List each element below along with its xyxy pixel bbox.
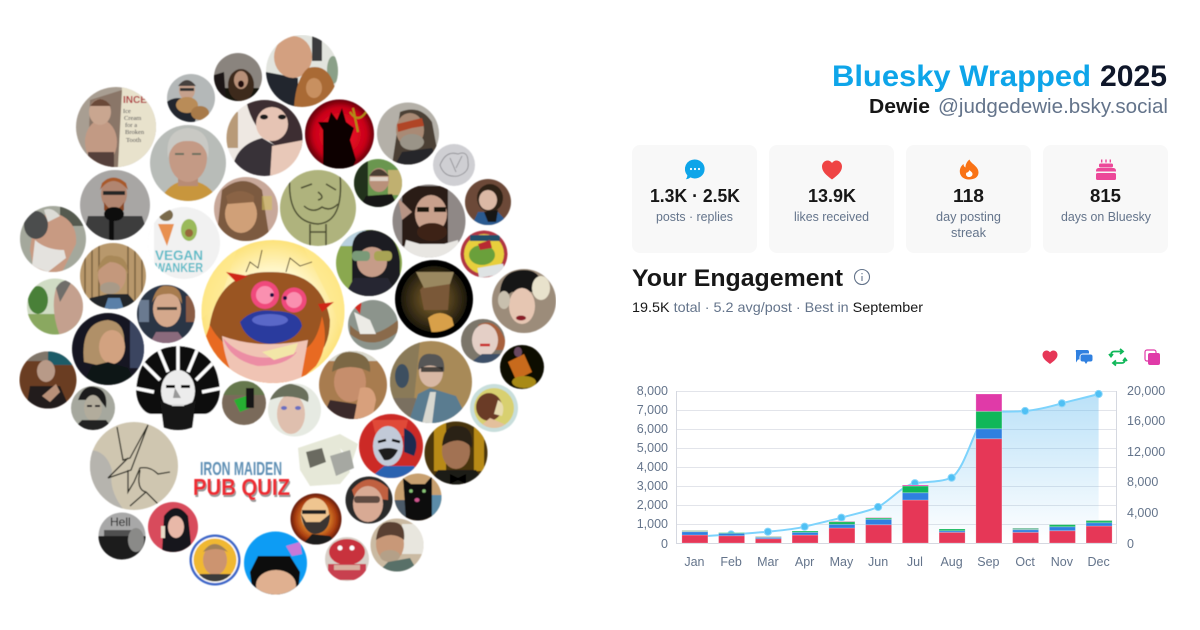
line points bbox=[728, 390, 1102, 538]
cumulative line bbox=[694, 394, 1099, 537]
chart legend icons bbox=[1042, 349, 1160, 366]
avatar cluster bbox=[19, 35, 556, 600]
icon: flame bbox=[960, 160, 978, 180]
avatar: bald man with spaniel bbox=[266, 35, 339, 107]
avatar: black and white portrait bbox=[71, 386, 115, 430]
avatar: man with blue ring bbox=[190, 534, 240, 586]
avatar: octopus poster bbox=[325, 537, 369, 581]
y axis right: 20,000 bbox=[1127, 384, 1165, 398]
avatar: man in cap with hand on cheek bbox=[319, 351, 387, 419]
avatar: pencil sketch bbox=[433, 144, 475, 186]
icon: info bbox=[854, 270, 870, 284]
bar: December bbox=[1086, 520, 1112, 543]
avatar: vegan mug: WANKER bbox=[155, 260, 204, 275]
icon: likes bbox=[1042, 350, 1058, 364]
avatar: woman with flower in hair bbox=[492, 269, 556, 333]
y axis right: 16,000 bbox=[1127, 414, 1165, 428]
avatar: ice cream book: INCE bbox=[123, 95, 147, 106]
x axis months: Apr bbox=[795, 555, 814, 569]
bar: September bbox=[976, 394, 1002, 543]
avatar: black cat bbox=[394, 473, 442, 522]
avatar: ice cream book bbox=[76, 87, 157, 168]
avatar: red clown painting bbox=[359, 414, 423, 478]
avatar: cleric in blue jacket bbox=[390, 341, 472, 424]
avatar: woman with glasses on head bbox=[214, 177, 278, 241]
avatar: Hell sign monochrome bbox=[98, 512, 146, 560]
y axis left bbox=[637, 384, 668, 551]
panel: day posting streak bbox=[906, 145, 1031, 253]
y axis left: 7,000 bbox=[637, 403, 668, 417]
x axis months: Dec bbox=[1087, 555, 1110, 569]
avatar: goblin graffiti bbox=[89, 421, 179, 511]
x axis months bbox=[684, 555, 1110, 569]
bar: October bbox=[1013, 528, 1039, 543]
avatar: clown makeup bbox=[461, 319, 505, 363]
title: 2025 bbox=[1100, 60, 1167, 93]
bar: July bbox=[902, 485, 928, 543]
avatar: woman on red wall bbox=[148, 502, 198, 552]
avatar: young bearded man with books bbox=[137, 285, 195, 343]
panel: days on Bluesky bbox=[1043, 145, 1168, 253]
avatar: ice cream book: Broken bbox=[125, 129, 145, 136]
avatar: woman with mirrored sunglasses bbox=[336, 230, 402, 296]
avatar: screaming figure bbox=[214, 53, 262, 102]
avatar: guitarist in the dark bbox=[500, 345, 544, 389]
bar: June bbox=[866, 517, 892, 543]
icon: heart bbox=[822, 160, 842, 180]
icon: replies bbox=[1076, 350, 1092, 364]
user name and handle: @judgedewie.bsky.social bbox=[938, 96, 1168, 118]
y axis right: 12,000 bbox=[1127, 445, 1165, 459]
avatar: man lying on green bbox=[354, 159, 402, 207]
x axis months: Jul bbox=[907, 555, 923, 569]
avatar: man on leather sofa bbox=[19, 351, 78, 409]
y axis left: 8,000 bbox=[637, 384, 668, 398]
avatar: curly hair illustration bbox=[470, 384, 518, 432]
panel: likes received bbox=[769, 145, 894, 253]
x axis months: Jun bbox=[868, 555, 888, 569]
avatar: vegan mug bbox=[148, 207, 220, 279]
logo: Iron Maiden Pub Quiz: PUB QUIZ bbox=[193, 474, 290, 500]
bar: August bbox=[939, 529, 965, 543]
panel: days on Bluesky: days on Bluesky bbox=[1061, 210, 1152, 224]
y axis right: 8,000 bbox=[1127, 475, 1158, 489]
avatar: white dog on a board bbox=[348, 300, 398, 350]
x axis months: Aug bbox=[940, 555, 963, 569]
icon: speech bubble bbox=[685, 159, 705, 179]
avatar: adjustable wrench bbox=[298, 434, 358, 486]
panel: posts and replies: posts · replies bbox=[656, 210, 733, 224]
avatar: man by candlelight with black ring bbox=[395, 260, 473, 338]
avatar: man in bow tie bbox=[424, 421, 488, 485]
bar: January bbox=[682, 530, 708, 543]
bar: April bbox=[792, 531, 818, 543]
bar: March bbox=[755, 536, 781, 543]
icon: quotes bbox=[1145, 350, 1160, 365]
avatar: goth woman bbox=[226, 98, 304, 178]
avatar: man with striped wood wall bbox=[79, 243, 147, 310]
avatar: vegan mug: VEGAN bbox=[155, 247, 203, 263]
x axis months: Feb bbox=[720, 555, 742, 569]
avatar: Hell sign monochrome: Hell bbox=[110, 515, 131, 529]
icon: cake bbox=[1096, 160, 1116, 180]
icon: reposts bbox=[1109, 349, 1127, 366]
engagement summary: 19.5K total · 5.2 avg/post · Best in September bbox=[632, 299, 923, 315]
avatar: man with headphones and white beard bbox=[20, 206, 86, 272]
title: Bluesky Wrapped bbox=[832, 60, 1091, 93]
avatar: blonde woman bbox=[72, 313, 144, 385]
avatar: large cartoon creature bbox=[201, 240, 345, 384]
y axis left: 3,000 bbox=[637, 479, 668, 493]
y axis left: 5,000 bbox=[637, 441, 668, 455]
bar: May bbox=[829, 521, 855, 543]
avatar: man with orange sunglasses bbox=[377, 102, 440, 165]
avatar: cartoon face doodle bbox=[280, 170, 356, 246]
x axis months: May bbox=[830, 555, 854, 569]
bar: February bbox=[719, 533, 745, 543]
heading: your engagement: Your Engagement bbox=[632, 265, 843, 292]
avatar: man on bright blue bbox=[244, 531, 308, 600]
bar: November bbox=[1049, 525, 1075, 543]
y axis right: 0 bbox=[1127, 537, 1134, 551]
x axis months: Jan bbox=[684, 555, 705, 569]
user name and handle: Dewie bbox=[869, 96, 930, 118]
avatar: green toy on gravel bbox=[222, 381, 266, 425]
avatar: man's eye in park bbox=[27, 278, 85, 336]
x axis months: Mar bbox=[757, 555, 779, 569]
logo: Iron Maiden Pub Quiz: IRON MAIDEN bbox=[200, 459, 282, 479]
avatar: man in flat cap bbox=[268, 383, 322, 437]
avatar: frog badge bbox=[460, 230, 508, 278]
y axis right bbox=[1127, 384, 1165, 551]
logo: Iron Maiden Pub Quiz: PUB QUIZ bbox=[194, 476, 291, 502]
stacked bars bbox=[682, 394, 1112, 543]
y axis left: 2,000 bbox=[637, 498, 668, 512]
avatar: ice cream book: Tooth bbox=[126, 137, 142, 144]
avatar: red devil silhouette bbox=[305, 99, 375, 169]
panel: likes received: likes received bbox=[794, 210, 869, 224]
panel: day posting streak: day posting bbox=[936, 210, 1001, 224]
avatar: red haired woman with glasses bbox=[345, 476, 393, 524]
y axis left: 4,000 bbox=[637, 460, 668, 474]
x axis months: Sep bbox=[977, 555, 1000, 569]
panel: day posting streak: streak bbox=[951, 226, 987, 240]
panel: posts and replies bbox=[632, 145, 757, 253]
avatar: grey haired man bbox=[150, 125, 226, 201]
panel: posts and replies: 1.3K · 2.5K bbox=[650, 186, 740, 206]
panel: days on Bluesky: 815 bbox=[1090, 186, 1121, 206]
avatar: ice cream book: for a bbox=[125, 122, 137, 129]
avatar: ice cream book: Ice bbox=[123, 108, 131, 115]
avatar: bald bearded cartoon bbox=[290, 493, 342, 545]
y axis left: 1,000 bbox=[637, 517, 668, 531]
avatar: man with dog bbox=[166, 74, 216, 123]
avatar: woman in clerical collar bbox=[465, 179, 511, 225]
cumulative area bbox=[694, 394, 1099, 543]
avatar: man with camera bbox=[80, 170, 150, 240]
panel: day posting streak: 118 bbox=[953, 186, 984, 206]
avatar: black and white stencil head bbox=[134, 346, 222, 430]
y axis left: 6,000 bbox=[637, 422, 668, 436]
combo chart: monthly engagement bbox=[637, 384, 1165, 569]
avatar: bearded man with elf ear bbox=[392, 184, 466, 260]
panel: likes received: 13.9K bbox=[808, 186, 856, 206]
y axis left: 0 bbox=[661, 537, 668, 551]
avatar: smiling man bbox=[370, 518, 424, 572]
avatar: ice cream book: Cream bbox=[124, 115, 141, 122]
x axis months: Nov bbox=[1051, 555, 1074, 569]
x axis months: Oct bbox=[1015, 555, 1035, 569]
y axis right: 4,000 bbox=[1127, 506, 1158, 520]
logo: Iron Maiden Pub Quiz bbox=[193, 459, 291, 502]
